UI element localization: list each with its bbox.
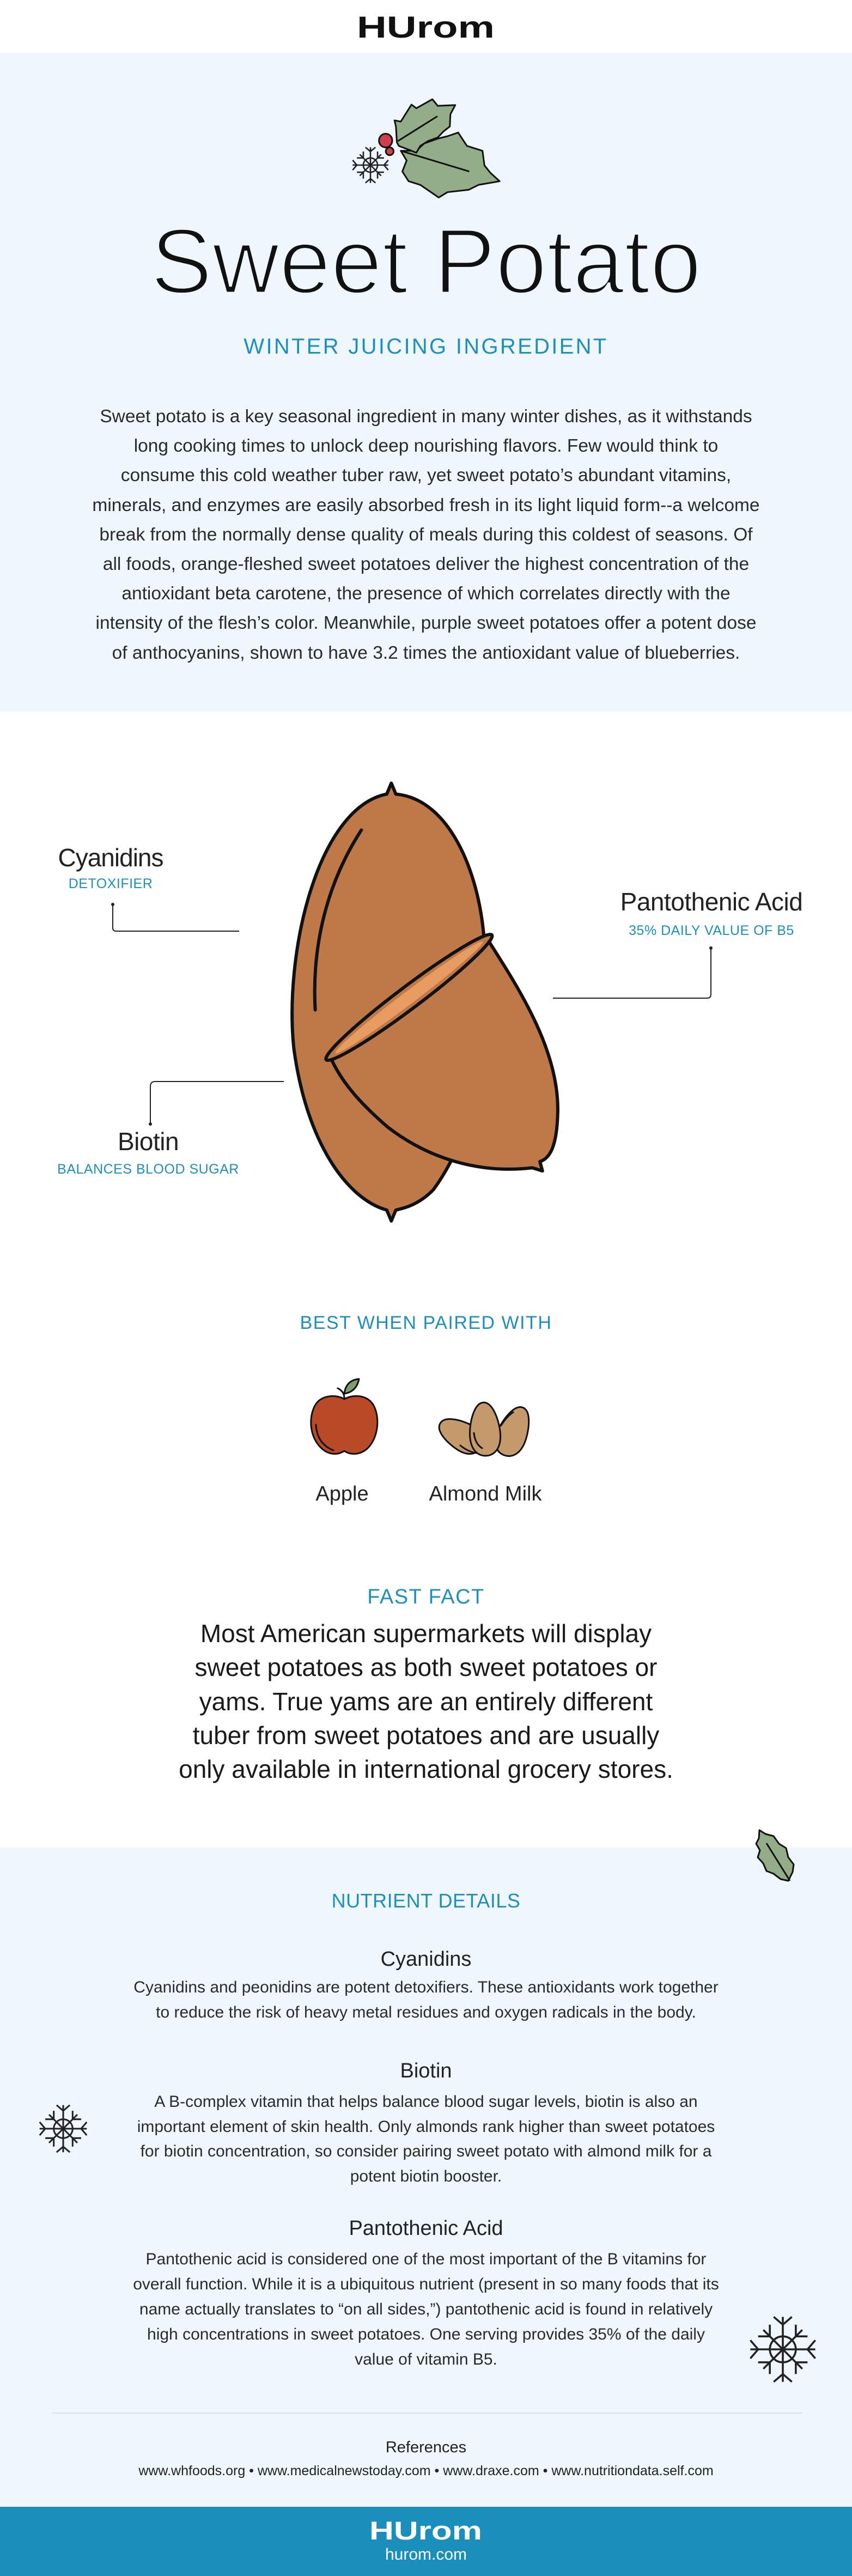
nutrient: cyanidins: Cyanidins [381,1948,471,1971]
icon: snowflake top [352,147,389,184]
illustration: sweet potato [290,781,559,1223]
label: apple: Apple [315,1483,369,1505]
nutrient: pantothenic acid: Pantothenic Acid [349,2217,503,2240]
nutrient: pantothenic acid: Pantothenic acid is considered one of the most important of the B vitamins for [146,2250,706,2268]
nutrient section background [0,1848,852,2507]
footer url: hurom.com [385,2545,467,2563]
references [138,2439,714,2478]
heading: fast fact: FAST FACT [367,1585,485,1608]
intro paragraph: of anthocyanins, shown to have 3.2 times the antioxidant value of blueberries. [112,643,740,663]
nutrient: pantothenic acid: name actually translates to “on all sides,”) pantothenic acid is found in relatively [139,2300,713,2318]
footer [0,2507,852,2576]
label: cyanidins [58,843,163,891]
intro paragraph: long cooking times to unlock deep nourishing flavors. Few would think to [134,436,718,456]
nutrient: pantothenic acid: overall function. While it is a ubiquitous nutrient (present in so many foods that its [133,2275,719,2293]
label: pantothenic acid [620,888,802,938]
nutrient: pantothenic acid: high concentrations in sweet potatoes. One serving provides 35% of the daily [147,2325,705,2343]
icon: almonds [438,1401,530,1457]
icon: apple [310,1378,378,1455]
fast fact text: tuber from sweet potatoes and are usually [193,1721,659,1749]
references: www.whfoods.org • www.medicalnewstoday.com • www.draxe.com • www.nutritiondata.self.com [138,2463,714,2478]
title: Sweet Potato [150,210,702,313]
intro paragraph: intensity of the flesh’s color. Meanwhile, purple sweet potatoes offer a potent dose [96,613,756,633]
intro paragraph: antioxidant beta carotene, the presence of which correlates directly with the [121,584,731,604]
connector: biotin [149,1081,284,1126]
nutrient: biotin: for biotin concentration, so consider pairing sweet potato with almond milk for a [141,2142,711,2160]
heading: nutrient details: NUTRIENT DETAILS [332,1890,520,1912]
connector: pantothenic acid [553,946,713,999]
fast fact text: only available in international grocery stores. [179,1755,673,1783]
nutrient: biotin: important element of skin health. Only almonds rank higher than sweet potatoes [137,2118,715,2136]
label: biotin [57,1127,239,1177]
connector: cyanidins [111,903,239,932]
nutrient: pantothenic acid [133,2217,719,2368]
icon: snowflake right [750,2316,816,2383]
label: biotin: BALANCES BLOOD SUGAR [57,1162,239,1177]
label: biotin: Biotin [118,1127,179,1156]
nutrient: cyanidins [133,1948,719,2021]
nutrient: biotin [137,2059,715,2185]
references: References [386,2439,466,2456]
intro paragraph [92,406,760,663]
nutrient: cyanidins: Cyanidins and peonidins are potent detoxifiers. These antioxidants work together [133,1978,719,1996]
intro paragraph: break from the normally dense quality of meals during this coldest of seasons. Of [99,525,753,545]
nutrient: biotin: A B-complex vitamin that helps balance blood sugar levels, biotin is also an [154,2093,698,2111]
label: cyanidins: Cyanidins [58,843,163,872]
label: cyanidins: DETOXIFIER [69,876,153,891]
fast fact text: yams. True yams are an entirely different [199,1687,653,1716]
fast fact text: Most American supermarkets will display [200,1619,652,1648]
nutrient: biotin: Biotin [400,2059,452,2082]
heading: best when paired with: BEST WHEN PAIRED WITH [300,1313,552,1333]
intro section background [0,53,852,712]
label: pantothenic acid: 35% DAILY VALUE OF B5 [629,923,794,938]
icon: holly leaf [755,1830,794,1882]
intro paragraph: minerals, and enzymes are easily absorbed fresh in its light liquid form--a welcome [92,495,760,515]
nutrient: pantothenic acid: value of vitamin B5. [355,2350,497,2368]
nutrient: cyanidins: to reduce the risk of heavy metal residues and oxygen radicals in the body. [156,2003,696,2021]
intro paragraph: Sweet potato is a key seasonal ingredient in many winter dishes, as it withstands [100,406,752,427]
intro paragraph: consume this cold weather tuber raw, yet sweet potato’s abundant vitamins, [121,465,731,485]
intro paragraph: all foods, orange-fleshed sweet potatoes deliver the highest concentration of the [103,554,749,574]
label: almond milk: Almond Milk [429,1483,541,1505]
fast fact text [179,1619,673,1783]
icon: holly with berries [378,98,501,198]
fast fact text: sweet potatoes as both sweet potatoes or [195,1653,657,1681]
label: pantothenic acid: Pantothenic Acid [620,888,802,916]
icon: snowflake left [39,2104,87,2153]
subtitle: WINTER JUICING INGREDIENT [244,335,608,359]
nutrient: biotin: potent biotin booster. [350,2167,502,2185]
